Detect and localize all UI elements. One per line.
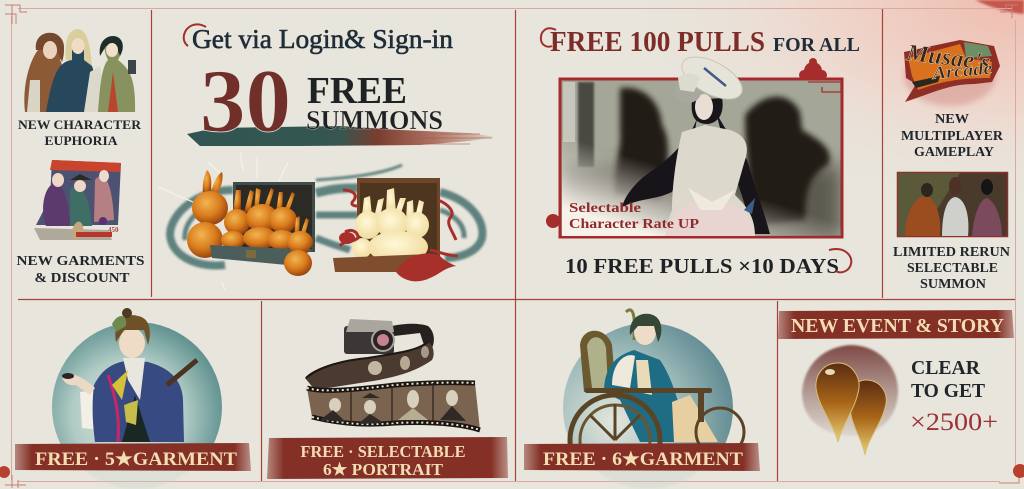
panel: free 6 star garment <box>524 310 760 489</box>
label: limited rerun selectable summon: LIMITED RERUN <box>893 244 1010 259</box>
main character in white dress <box>622 112 770 236</box>
label: new multiplayer gameplay: GAMEPLAY <box>914 144 994 159</box>
banner: free 5 star garment: FREE · 5★GARMENT <box>35 450 238 470</box>
caption: selectable character rate up <box>569 201 700 232</box>
image: selectable character banner <box>546 48 851 278</box>
ink circle backdrop <box>52 322 222 489</box>
panel: login and sign-in summons <box>158 24 495 290</box>
character in wheelchair <box>568 308 746 444</box>
icon: amber drops <box>816 363 886 455</box>
amber rabbit large <box>187 170 228 258</box>
decorative knot ornaments <box>546 58 841 228</box>
banner: free 6 star garment: FREE · 6★GARMENT <box>543 450 744 470</box>
brush stroke under headline <box>187 126 495 146</box>
label: limited rerun selectable summon: SELECTABLE <box>907 260 998 275</box>
banner: new event and story: NEW EVENT & STORY <box>791 316 1004 337</box>
text: clear to get <box>911 357 986 402</box>
image: limited rerun characters <box>898 172 1008 236</box>
heading: free 100 pulls for all: FOR ALL <box>773 34 860 56</box>
icon: vintage camera <box>344 319 434 354</box>
icon: cream rabbits in wooden case <box>333 178 458 281</box>
logo: musae's arcade: Musae's <box>904 40 992 76</box>
headline free summons: FREE <box>307 70 407 112</box>
label: limited rerun selectable summon <box>893 244 1010 291</box>
banner: free selectable 6 star portrait: 6★ PORTRAIT <box>323 460 444 479</box>
icon: amber rabbits in case <box>187 170 315 276</box>
lower film strip <box>307 383 480 430</box>
character in blue robe <box>62 308 197 442</box>
banner: free selectable 6 star portrait <box>267 437 508 479</box>
heading: free 100 pulls for all: FREE 100 PULLS <box>550 27 765 58</box>
text: times 2500 plus: ×2500+ <box>910 409 998 436</box>
label: new character euphoria: NEW CHARACTER <box>18 117 142 132</box>
sparkle rays <box>158 152 288 290</box>
panel: multiplayer and rerun <box>893 40 1010 291</box>
text: clear to get: TO GET <box>911 380 986 402</box>
decorative red ring <box>829 249 851 272</box>
label: new character euphoria: EUPHORIA <box>44 133 118 148</box>
heading: get via login and sign-in: Get via Login& Sign-in <box>192 24 453 54</box>
label: new multiplayer gameplay: NEW <box>935 111 970 126</box>
label: new character euphoria <box>18 117 142 148</box>
ink swirl backdrop <box>170 165 482 266</box>
amber rabbits group <box>221 188 297 250</box>
logo: musae's arcade: Arcade <box>930 58 993 83</box>
hat and face overlapping frame <box>675 48 749 124</box>
panel: free selectable portrait <box>267 319 508 479</box>
banner: free selectable 6 star portrait: FREE · SELECTABLE <box>300 442 466 461</box>
upper film strip <box>305 342 434 390</box>
label: limited rerun selectable summon: SUMMON <box>920 276 986 291</box>
decorative red ring <box>184 24 206 46</box>
decorative red ring <box>541 28 556 47</box>
banner: new event and story <box>778 310 1014 339</box>
label: new multiplayer gameplay: MULTIPLAYER <box>901 128 1003 143</box>
label: new multiplayer gameplay <box>901 111 1003 159</box>
text: clear to get: CLEAR <box>911 357 981 379</box>
banner: free 5 star garment <box>15 443 251 471</box>
label: new garments and discount: & DISCOUNT <box>34 271 130 286</box>
label: new garments and discount: NEW GARMENTS <box>16 254 145 269</box>
logo: musae's arcade <box>904 40 1000 106</box>
image: three new characters <box>24 29 136 112</box>
image: garment catalogue: 450 <box>108 226 119 234</box>
brush circle backdrop <box>802 345 898 436</box>
panel: new character and garments <box>16 29 145 286</box>
panel: new event and story <box>778 310 1014 455</box>
caption: selectable character rate up: Character Rate UP <box>569 217 700 232</box>
headline number 30: 30 <box>200 52 291 151</box>
headline free summons: SUMMONS <box>306 105 443 135</box>
amber rabbit small front <box>284 216 313 276</box>
headline free summons <box>306 70 443 135</box>
icon: film strip with portraits <box>305 342 480 430</box>
panel: free 5 star garment <box>15 308 251 489</box>
banner: free 6 star garment <box>524 443 760 471</box>
ink circle backdrop <box>563 323 733 489</box>
text: 10 free pulls times 10 days: 10 FREE PULLS ×10 DAYS <box>565 254 839 278</box>
label: new garments and discount <box>16 254 145 286</box>
shadow scenery clipped to frame <box>562 81 841 236</box>
image: garment catalogue <box>34 160 121 240</box>
caption: selectable character rate up: Selectable <box>569 201 641 216</box>
